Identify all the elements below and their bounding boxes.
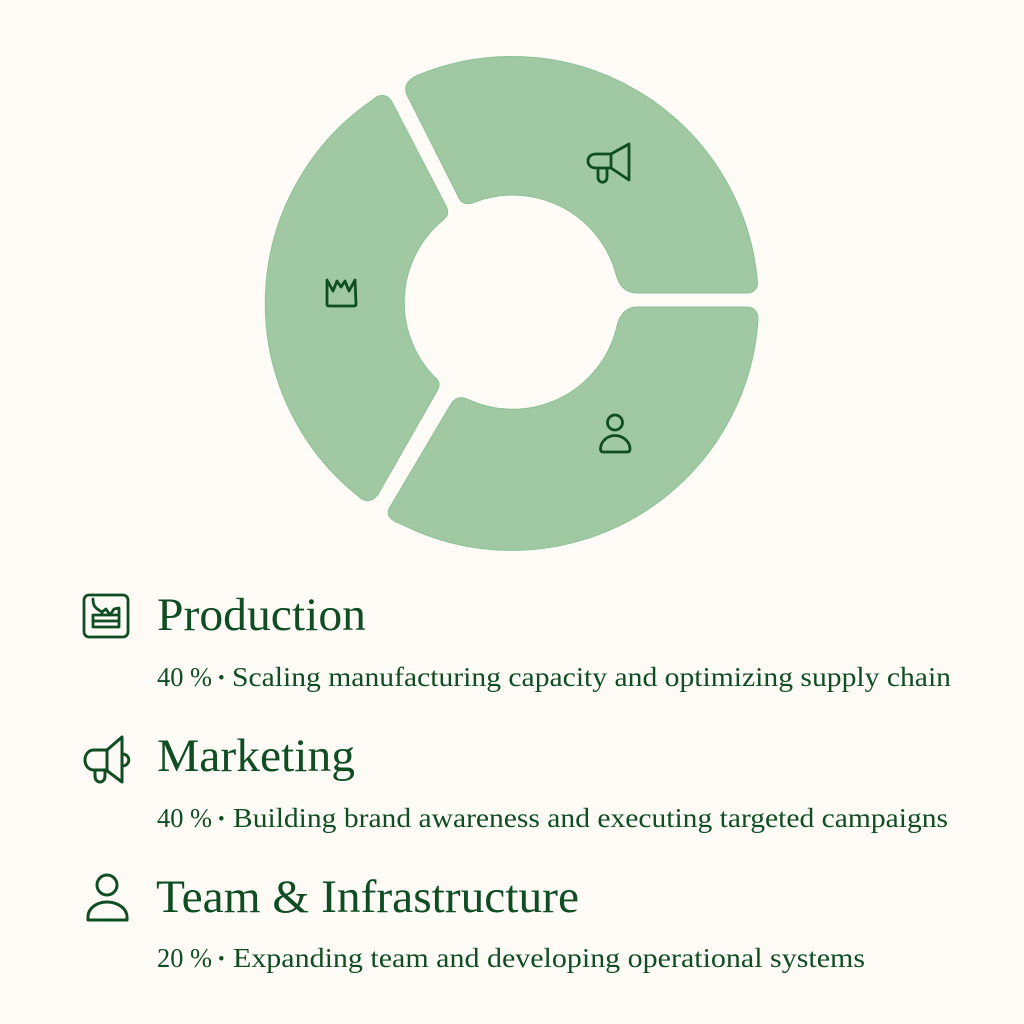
heading: team and infrastructure: Team & Infrastructure: [156, 872, 579, 923]
description: marketing: 40 %: [157, 802, 212, 833]
heading: production: Production: [157, 590, 366, 641]
icon: production factory: [84, 595, 128, 637]
description: team and infrastructure: •: [218, 949, 225, 970]
segment: team and infrastructure: [388, 307, 758, 550]
description: production: 40 %: [157, 661, 212, 692]
description: production: Scaling manufacturing capacity and optimizing supply chain: [232, 661, 951, 692]
donut chart: [265, 57, 758, 550]
description: production: •: [218, 668, 225, 689]
description: marketing: •: [218, 809, 225, 830]
description: marketing: Building brand awareness and executing targeted campaigns: [233, 802, 948, 833]
icon: marketing megaphone: [85, 737, 129, 782]
description: team and infrastructure: Expanding team and developing operational systems: [233, 942, 865, 973]
legend: team and infrastructure: [88, 872, 865, 973]
segment: marketing: [406, 57, 758, 293]
icon: team person: [88, 875, 127, 920]
legend: marketing: [85, 731, 948, 833]
icon: person on chart: [600, 415, 630, 452]
icon: crown on chart: [327, 280, 356, 306]
icon: megaphone on chart: [588, 144, 629, 182]
legend: production: [84, 590, 951, 692]
segment: production: [265, 95, 448, 501]
heading: marketing: Marketing: [157, 731, 355, 782]
description: team and infrastructure: 20 %: [157, 942, 212, 973]
